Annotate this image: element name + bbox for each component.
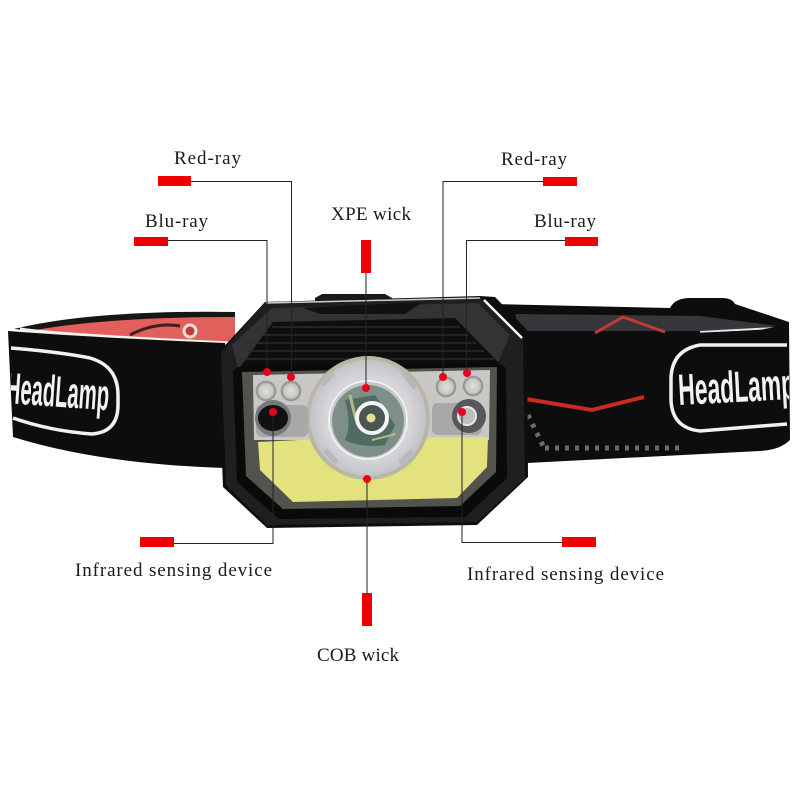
upper bezel	[232, 303, 510, 368]
callout: Blu-ray right: Blu-ray	[534, 211, 596, 232]
callout: Infrared sensing device right	[458, 408, 664, 585]
blue and red LEDs	[255, 375, 484, 402]
strap badge: HeadLamp: HeadLamp	[4, 365, 111, 420]
callout: Infrared sensing device right: Infrared sensing device	[467, 564, 664, 585]
grey stitch	[528, 415, 685, 450]
callout: Red-ray left: Red-ray	[174, 148, 242, 169]
right infrared sensor	[432, 399, 486, 435]
top slot	[303, 302, 423, 314]
top button	[315, 294, 392, 312]
callout: Blu-ray left: Blu-ray	[145, 211, 208, 232]
strap band	[8, 331, 225, 468]
right strap	[490, 298, 796, 463]
headlamp body	[218, 294, 528, 528]
strap badge: HeadLamp	[4, 348, 118, 434]
callout: Red-ray left	[158, 148, 295, 381]
strap badge: HeadLamp	[671, 345, 796, 431]
central optic	[306, 356, 430, 480]
strap inner red lining	[14, 312, 235, 345]
callout: Infrared sensing device left: Infrared sensing device	[75, 560, 272, 581]
lens glass border	[242, 367, 497, 509]
callout: COB wick	[317, 475, 400, 666]
callout: Blu-ray right	[463, 211, 598, 377]
left strap	[4, 312, 235, 468]
callout: Red-ray right: Red-ray	[501, 149, 568, 170]
housing	[218, 296, 528, 528]
strap inner lining	[490, 298, 789, 340]
left infrared sensor	[255, 400, 308, 437]
callout: XPE wick	[331, 204, 412, 392]
callout: Red-ray right	[439, 149, 577, 381]
speaker grille	[238, 318, 498, 370]
red stitch	[526, 397, 644, 410]
strap band	[515, 323, 790, 463]
callout: XPE wick: XPE wick	[331, 204, 412, 225]
lens frame	[233, 362, 507, 519]
callout: Blu-ray left	[134, 211, 271, 376]
COB panel	[258, 437, 488, 502]
callout: Infrared sensing device left	[75, 408, 277, 581]
callout: COB wick: COB wick	[317, 645, 400, 666]
lens panel	[253, 370, 490, 440]
strap badge: HeadLamp: HeadLamp	[677, 360, 796, 415]
